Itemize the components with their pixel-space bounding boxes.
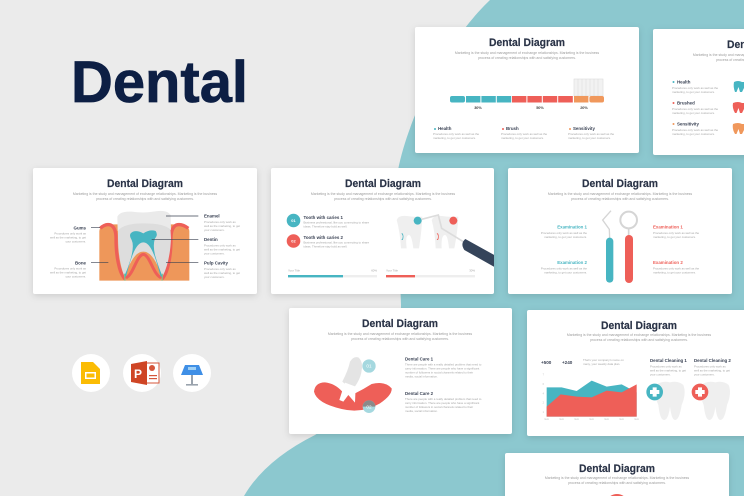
label: Examination 2 left	[541, 260, 588, 274]
item: caries 2: ideas. Therefore stay bold as well.	[304, 244, 348, 248]
panel: tooth list slide	[653, 29, 744, 155]
text block: Dental Cleaning 1: your customers.	[650, 372, 671, 376]
text block: Dental Care 2: carry information. There are people who have a significant	[405, 401, 480, 405]
label: Examination 2 right: Procedures only work as well as the	[653, 266, 700, 270]
label: Dentin: your customers.	[204, 252, 225, 256]
text block: intro: Marketing is the study and management of exchange relationships. Marketing is the business	[328, 332, 472, 336]
progress bar: 30%: Your Title	[386, 268, 398, 272]
text block: intro: Marketing is the study and management of exchange relationships. Marketing is the business	[548, 192, 692, 196]
item: caries 2: 02	[291, 238, 296, 244]
label: Enamel	[204, 214, 240, 232]
area chart	[543, 375, 639, 421]
label: Bone: Bone	[75, 260, 87, 266]
illustration: teeth and dental probe	[397, 215, 498, 270]
heading: Dental Diagram	[107, 178, 183, 190]
area chart: Item	[544, 418, 549, 421]
app icons row	[72, 354, 211, 392]
text block: intro: Marketing is the study and management of exchange relationships. Marketing is the business	[73, 192, 217, 196]
hatched remainder	[574, 79, 603, 96]
label: Enamel: Procedures only work as	[204, 220, 236, 224]
stats: +500	[541, 360, 552, 365]
heading: Dental Diagram	[579, 463, 655, 475]
text block: intro	[545, 476, 689, 485]
legend: Health: marketing, to get your customers.	[433, 136, 476, 140]
text block: Dental Care 2: media, social information.	[405, 409, 438, 413]
segmented bar chart: 50%	[536, 106, 544, 110]
text block: Dental Care 1: carry information. There are people who have a significant	[405, 366, 480, 370]
text block: intro	[328, 332, 472, 341]
label: Examination 1 right: marketing, to get your customers.	[653, 235, 696, 239]
label: Enamel: well as the marketing, to get	[204, 224, 240, 228]
text block: Dental Care 2: There are people with a really detailed problem that need to	[405, 397, 482, 401]
item: Brushed: marketing, to get your customers.	[672, 111, 715, 115]
stats	[541, 358, 624, 366]
stats: many, your weekly data plan.	[583, 362, 620, 366]
legend: Brush: Procedures only work as well as the	[501, 132, 548, 136]
text block: intro: process of creating relationships with and satisfying customers.	[351, 337, 449, 341]
legend: Health: Procedures only work as well as the	[433, 132, 480, 136]
legend: Sensitivity	[568, 126, 615, 140]
label: Examination 1 left: Examination 1	[557, 224, 588, 230]
illustration: tooth and gum: 02	[366, 404, 372, 409]
label: Gums: Procedures only work as	[54, 232, 87, 236]
text block: Dental Cleaning 2	[694, 358, 731, 376]
area chart: Item	[634, 418, 639, 421]
main title: Dental	[71, 50, 248, 115]
label: Examination 2 right: marketing, to get your customers.	[653, 270, 696, 274]
segmented bar chart: 30%	[474, 106, 482, 110]
area chart: 4	[543, 393, 545, 395]
text block: intro: Marketing is the study and management of exchange relationships. Marketing is the business	[567, 333, 711, 337]
area chart: Item	[559, 418, 564, 421]
label: Gums: Gums	[74, 226, 87, 230]
label: Pulp Cavity	[204, 260, 240, 279]
label: Bone	[50, 260, 87, 278]
legend: Sensitivity: Procedures only work as well as the	[568, 132, 615, 136]
item: caries 1: ideas. Therefore stay bold as well.	[304, 224, 348, 228]
item: Sensitivity: Sensitivity	[677, 122, 700, 126]
item: Health: Health	[677, 80, 691, 84]
label: Dentin	[204, 237, 240, 256]
stats: That's your company's name on	[583, 358, 624, 362]
legend: Health: Health	[438, 126, 452, 131]
item: Brushed: Procedures only work as well as the	[672, 107, 719, 111]
legend: Health	[433, 126, 480, 140]
label: Gums: well as the marketing, to get	[50, 236, 86, 240]
item: Sensitivity	[672, 122, 744, 136]
label: Dentin: Dentin	[204, 237, 218, 242]
label: Bone: well as the marketing, to get	[50, 270, 86, 274]
icon: tooth with teal plus	[646, 382, 685, 420]
panel: examination tools slide	[508, 168, 732, 294]
item: Health: Procedures only work as well as the	[672, 86, 719, 90]
text block: intro	[567, 333, 711, 342]
label: Gums: your customers.	[65, 240, 86, 244]
label: Enamel: your customers.	[204, 228, 225, 232]
text block: intro	[455, 51, 599, 60]
panel: bottom cropped slide	[505, 453, 729, 496]
text block: Dental Care 1: media, social information.	[405, 374, 438, 378]
item: caries 1: Business professional, like you connecting to share	[304, 220, 369, 224]
label: Bone: your customers.	[65, 274, 86, 278]
label: Examination 1 right: Examination 1	[653, 224, 683, 230]
text block: Dental Cleaning 1: Dental Cleaning 1	[650, 358, 687, 363]
text block: intro	[693, 53, 744, 62]
text block: Dental Cleaning 2: your customers.	[694, 372, 715, 376]
text block: intro	[73, 192, 217, 201]
item: caries 1: Tooth with caries 1	[304, 215, 343, 220]
item: caries 1	[287, 214, 369, 228]
text block: intro: process of creating relationships with and satisfying customers.	[571, 197, 669, 201]
text block: Dental Cleaning 2: Dental Cleaning 2	[694, 358, 731, 363]
label: Examination 2 left: Procedures only work as well as the	[541, 266, 587, 270]
label: Bone: Procedures only work as	[54, 266, 87, 270]
item: caries 2: Business professional, like you connecting to share	[304, 240, 369, 244]
text block: intro: Marketing is the study and management of exchange relationships. Marketing is the business	[455, 51, 599, 55]
label: Enamel: Enamel	[204, 214, 220, 218]
area chart: 2	[543, 403, 545, 405]
progress bar: 60%	[288, 268, 377, 277]
legend: Sensitivity: Sensitivity	[573, 126, 596, 131]
panel: tooth with caries slide	[271, 168, 498, 294]
item: caries 1: 01	[291, 218, 296, 223]
legend: Sensitivity: marketing, to get your customers.	[568, 136, 611, 140]
heading: Dental Diagram	[345, 178, 421, 190]
area chart: Item	[574, 418, 579, 421]
text block: intro: process of creating relationships with and satisfying customers.	[478, 56, 576, 60]
label: Pulp Cavity: well as the marketing, to get	[204, 271, 240, 275]
panel: dental care slide	[289, 308, 512, 434]
area chart: Item	[619, 418, 624, 421]
label: Examination 1 left: Procedures only work as well as the	[541, 231, 587, 235]
item: caries 2: Tooth with caries 2	[304, 235, 343, 240]
teal background shape	[244, 0, 744, 496]
item: Sensitivity: Procedures only work as well as the	[672, 128, 719, 132]
legend: Brush: marketing, to get your customers.	[501, 136, 544, 140]
heading: Dental Diagram	[489, 37, 565, 49]
item: Brushed: Brushed	[677, 100, 695, 106]
illustration: tooth and gum	[314, 357, 392, 413]
progress bar: 30%: 30%	[469, 268, 475, 272]
heading: Dental Diagram	[601, 320, 677, 332]
text block: Dental Cleaning 2: Procedures only work as	[694, 364, 726, 368]
progress bar: 30%	[386, 268, 475, 277]
label: Examination 2 left: Examination 2	[557, 260, 588, 265]
icon: PowerPoint: P	[134, 367, 142, 381]
label: Examination 1 right	[653, 224, 700, 239]
label: Gums	[50, 226, 87, 244]
item: Health	[672, 80, 744, 94]
area chart: 7	[543, 375, 545, 377]
text block: Dental Cleaning 1	[650, 358, 687, 376]
legend: Brush	[501, 126, 548, 140]
area chart: 1	[543, 412, 545, 414]
segmented bar chart	[450, 96, 604, 110]
text block: intro	[548, 192, 692, 201]
heading: Dental Diagram	[582, 178, 658, 190]
text block: Dental Care 1: There are people with a really detailed problem that need to	[405, 362, 482, 366]
text block: intro: process of creating relationships with and satisfying customers.	[334, 197, 432, 201]
text block: Dental Care 2: number of followers in social channels related to their	[405, 405, 473, 409]
text block: Dental Care 2: Dental Care 2	[405, 391, 434, 396]
segmented bar chart: 20%	[580, 106, 588, 110]
label: Examination 1 left: marketing, to get your customers.	[544, 235, 587, 239]
text block: intro: Marketing is the study and management of exchange relationships. Marketing is the business	[545, 476, 689, 480]
text block: Dental Cleaning 1: Procedures only work as	[650, 364, 682, 368]
area chart: 6	[543, 384, 545, 386]
label: Examination 1 right: Procedures only work as well as the	[653, 231, 700, 235]
text block: intro	[311, 192, 455, 201]
area chart: Item	[604, 418, 609, 421]
icon: Keynote	[173, 354, 211, 392]
item: Sensitivity: marketing, to get your customers.	[672, 132, 715, 136]
progress bar: 60%: Your Title	[288, 268, 300, 272]
item: Brushed	[672, 100, 744, 115]
text block: Dental Cleaning 1: well as the marketing, to get	[650, 368, 686, 372]
legend: Brush: Brush	[506, 126, 519, 131]
area chart: Item	[589, 418, 594, 421]
label: Pulp Cavity: your customers.	[204, 275, 225, 279]
label: Examination 2 right: Examination 2	[653, 260, 683, 265]
item: Health: marketing, to get your customers.	[672, 90, 715, 94]
heading: Dental Diagram	[362, 318, 438, 330]
label: Examination 2 right	[653, 260, 700, 274]
illustration: probe and mirror	[603, 211, 637, 283]
label: Dentin: Procedures only work as	[204, 244, 236, 248]
item: caries 2	[287, 234, 369, 248]
label: Pulp Cavity: Procedures only work as	[204, 267, 236, 271]
text block: intro: process of creating relationships with and satisfying customers.	[96, 197, 194, 201]
panel: tooth anatomy slide	[33, 168, 257, 294]
icon: tooth with red plus	[692, 382, 730, 420]
stats: +240	[562, 360, 573, 365]
text block: Dental Cleaning 2: well as the marketing, to get	[694, 368, 730, 372]
label: Pulp Cavity: Pulp Cavity	[204, 260, 228, 266]
text block: intro: Marketing is the study and management of exchange relationships. Marketing is the business	[311, 192, 455, 196]
illustration: tooth and gum: 01	[366, 364, 372, 369]
text block: Dental Care 1: number of followers in social channels related to their	[405, 370, 473, 374]
text block: intro: process of creating relationships with and satisfying customers.	[590, 338, 688, 342]
label: Dentin: well as the marketing, to get	[204, 248, 240, 252]
panel: progress bar slide	[415, 27, 639, 153]
gum arc	[610, 494, 624, 496]
text block: intro: process of creating relationships with and satisfying customers.	[568, 481, 666, 485]
panel: dental cleaning slide	[527, 310, 744, 436]
text block: Dental Care 1	[405, 356, 482, 378]
text block: Dental Care 1: Dental Care 1	[405, 356, 434, 362]
diagram: tooth cross-section	[91, 211, 198, 281]
label: Examination 1 left	[541, 224, 588, 239]
progress bar: 60%: 60%	[371, 268, 377, 272]
text block: Dental Care 2	[405, 391, 482, 413]
label: Examination 2 left: marketing, to get your customers.	[544, 270, 587, 274]
icon: Google Slides	[72, 354, 110, 392]
